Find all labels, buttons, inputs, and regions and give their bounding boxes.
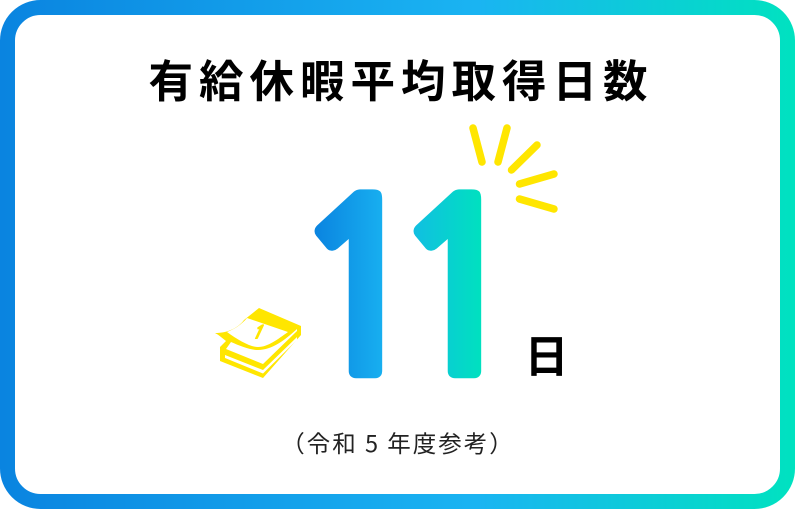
icon: tear-off calendar (215, 308, 301, 378)
big number: 11: 11 (288, 174, 531, 410)
calendar numeral: 1 (249, 323, 269, 341)
unit: day: 日 (524, 321, 568, 385)
title: 有給休暇平均取得日数 (148, 45, 654, 110)
icon: sparkle rays (473, 128, 554, 209)
note: reference year: （令和 5 年度参考） (281, 425, 515, 459)
